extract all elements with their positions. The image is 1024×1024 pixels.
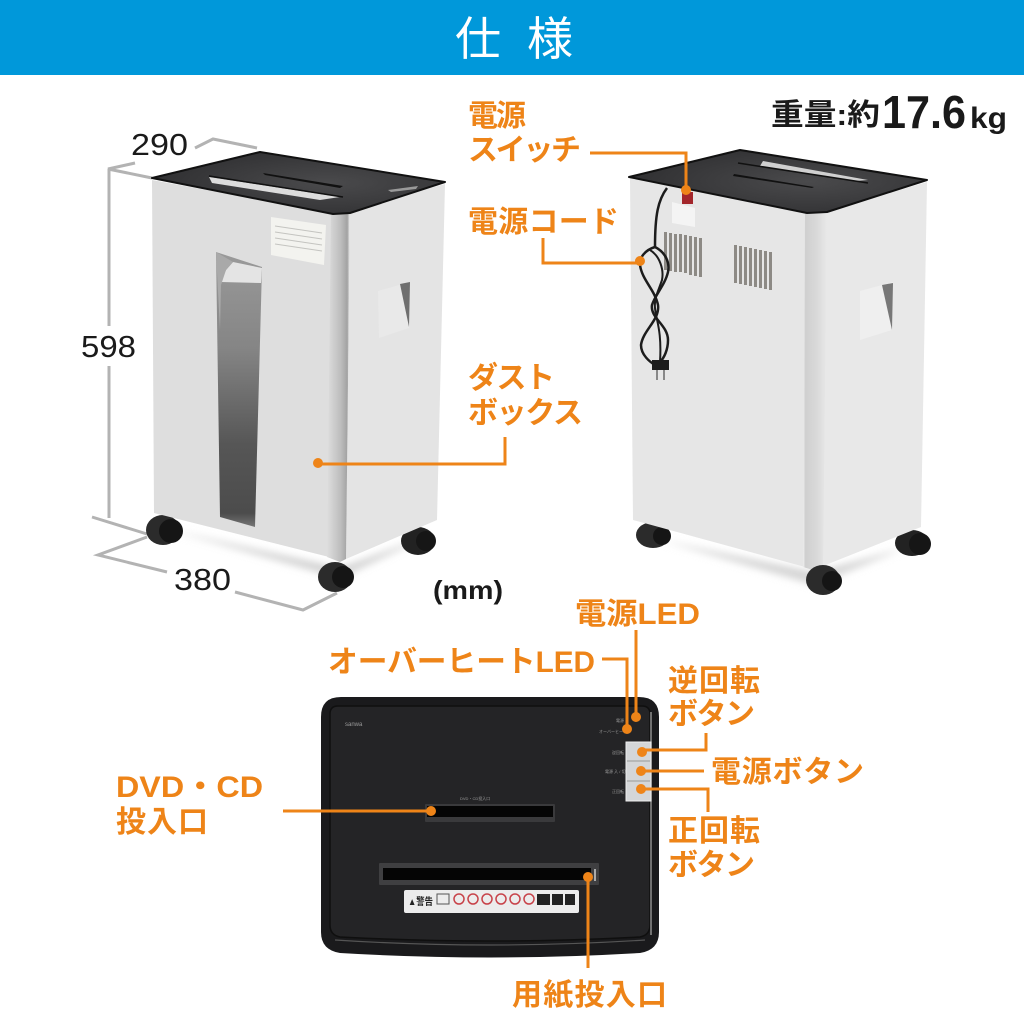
shredder back view: [629, 150, 931, 595]
callout: dust box: ボックス: [468, 397, 583, 430]
warning label: [404, 890, 579, 913]
front face: [152, 180, 337, 558]
callout: forward button: ボタン: [668, 849, 755, 882]
vent left: [664, 232, 702, 277]
callout: power LED: 電源LED: [575, 598, 700, 631]
callout: forward button: [636, 784, 760, 882]
callout: dust box: ダスト: [468, 361, 555, 395]
dimension: depth: 380: [174, 562, 231, 597]
unit note: (mm): [433, 575, 503, 605]
bottom rim highlight: [335, 940, 645, 945]
dimension: width: 290: [131, 127, 188, 162]
panel captions: オーバーヒート: [599, 729, 627, 734]
back face: [630, 178, 807, 567]
callout: reverse button: 逆回転: [668, 665, 760, 698]
caution label: [271, 217, 326, 265]
callout: overheat LED: [328, 646, 632, 734]
side face: [346, 184, 445, 559]
window: [216, 252, 262, 527]
handle: [860, 282, 893, 340]
paper slot: [209, 176, 343, 200]
panel captions: 電源: [616, 717, 624, 723]
callout: paper slot: [512, 872, 667, 1012]
callout: power cord: 電源コード: [468, 206, 619, 239]
caster front: [318, 562, 354, 592]
casing: [321, 697, 659, 958]
casters rear: [146, 515, 436, 555]
callout: disc slot: 投入口: [116, 806, 208, 839]
weight spec: 重量:約: [771, 99, 880, 132]
callout: forward button: 正回転: [668, 815, 760, 848]
brand mark: sanwa: [345, 722, 363, 728]
callout: reverse button: [637, 665, 760, 757]
shredder front view: [146, 152, 445, 592]
panel captions: 逆回転: [612, 749, 624, 755]
floor shadow: [170, 530, 430, 578]
warning label: ▲警告: [408, 895, 433, 908]
callout: power switch: 電源: [468, 100, 526, 133]
rating label: [672, 202, 695, 227]
right rim highlight: [650, 712, 652, 935]
callout: dust box: [313, 361, 583, 468]
shredder top view: [321, 697, 659, 958]
callout: reverse button: ボタン: [668, 698, 755, 731]
callout: power LED: [575, 598, 700, 722]
handle: [378, 282, 410, 338]
handle recess: [882, 283, 893, 330]
callout: power switch: スイッチ: [468, 134, 581, 167]
slots: [733, 161, 868, 188]
top lid: [629, 150, 927, 213]
panel captions: 正回転: [612, 789, 624, 794]
weight spec: kg: [970, 102, 1007, 135]
dimension: height: 598: [81, 329, 136, 364]
vent right: [734, 245, 772, 290]
corner strip: [803, 212, 827, 570]
corner strip: [327, 211, 350, 562]
side face: [813, 182, 927, 570]
callout: power cord: [468, 206, 645, 266]
inner bezel: [330, 706, 650, 941]
cd slot: [425, 804, 555, 822]
power switch: [682, 192, 693, 204]
dimension lines: [92, 139, 337, 610]
callout: disc slot: DVD・CD: [116, 771, 263, 804]
weight spec: [771, 86, 1007, 138]
callout: overheat LED: オーバーヒートLED: [328, 646, 595, 679]
callout: power button: 電源ボタン: [711, 756, 864, 789]
brand mark: [388, 186, 418, 192]
title: 仕様: [455, 13, 599, 65]
callout: power button: [636, 756, 864, 789]
power cord: [640, 188, 669, 380]
panel captions: [460, 717, 627, 801]
button panel: [626, 742, 651, 801]
plug: [652, 360, 669, 380]
panel captions: DVD・CD投入口: [460, 795, 490, 801]
cd slot: [263, 173, 343, 188]
callout: paper slot: 用紙投入口: [512, 979, 667, 1012]
casters rear: [636, 522, 931, 556]
caster front: [806, 565, 842, 595]
panel captions: 電源 入 / 切: [605, 768, 625, 774]
top lid: [152, 152, 445, 214]
paper slot: [379, 863, 599, 885]
header band: [0, 0, 1024, 75]
callout: power switch: [468, 100, 691, 195]
callout: disc slot: [116, 771, 436, 839]
handle recess: [400, 282, 410, 327]
weight spec: 17.6: [882, 86, 966, 138]
floor shadow: [660, 540, 905, 585]
